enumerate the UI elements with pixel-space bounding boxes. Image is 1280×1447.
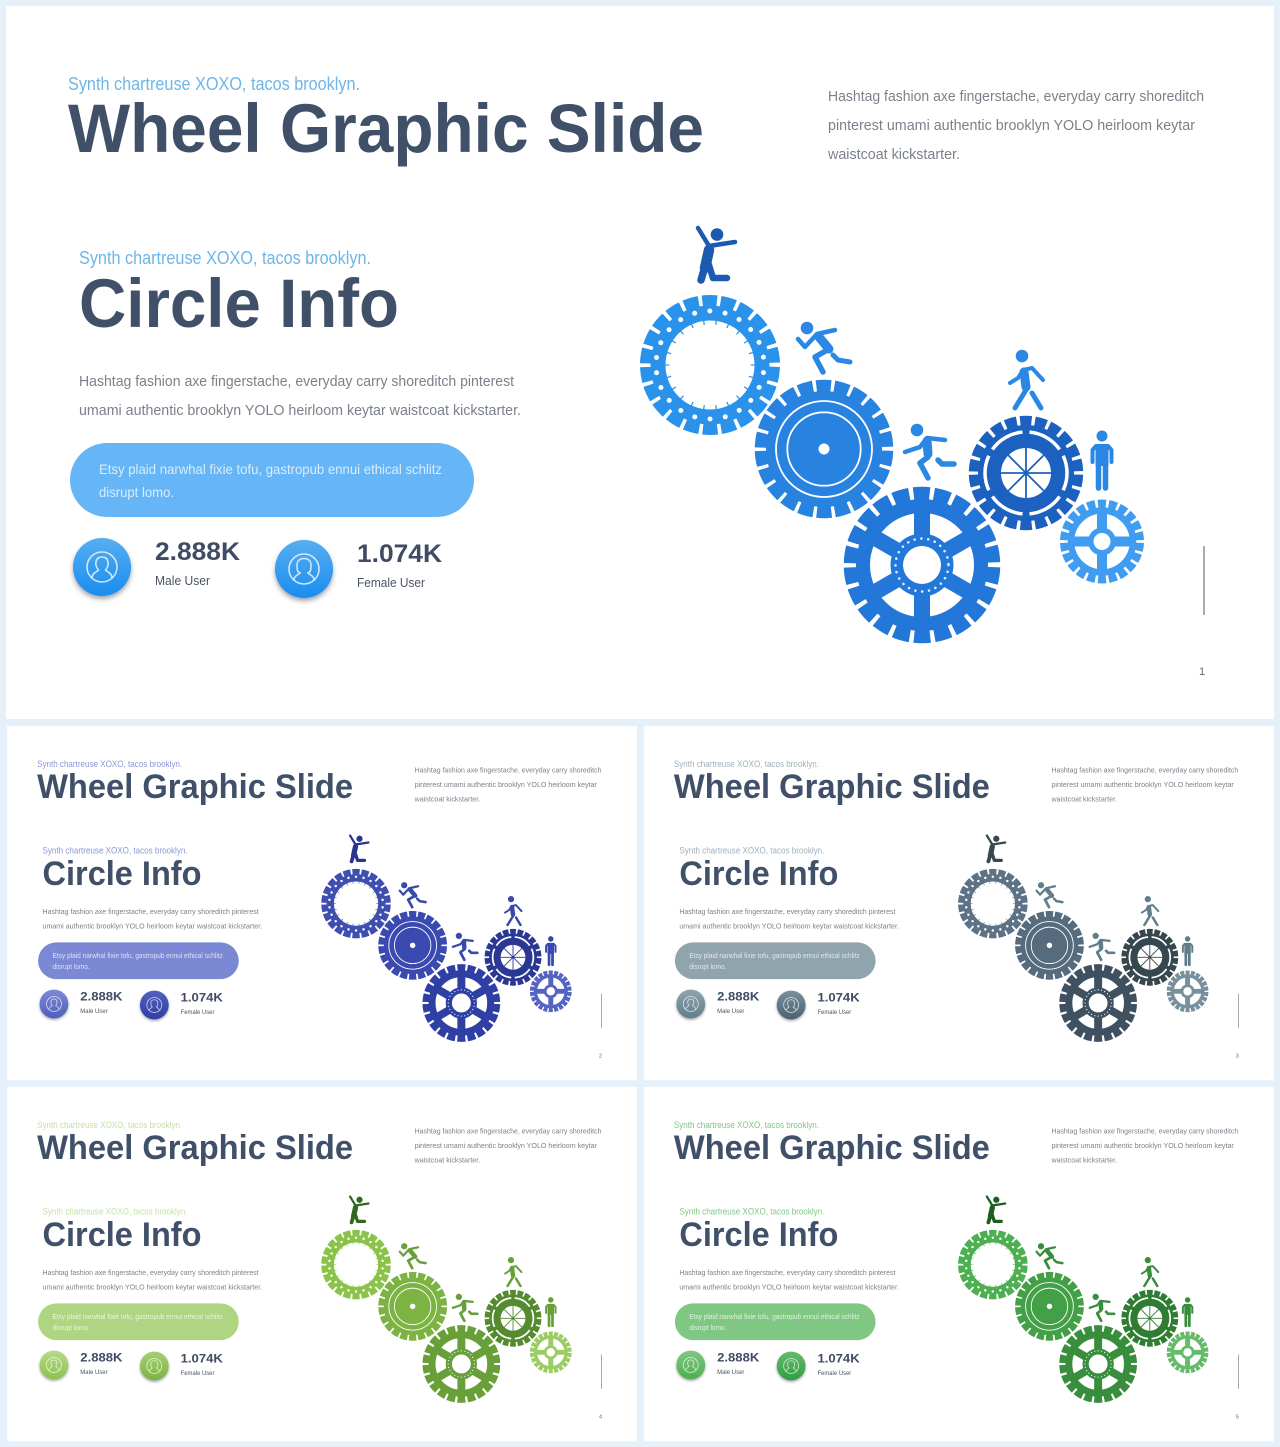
sub tagline: Synth chartreuse XOXO, tacos brooklyn. [43,845,188,855]
heading: Circle Info: Circle Info [679,855,838,893]
stat: female user: Female User [817,1370,852,1377]
callout pill [675,942,876,979]
page number: 2 [599,1054,602,1060]
panel: small slide gray [644,726,1274,1080]
page number: 1 [1199,666,1205,678]
figure: sprinter [905,424,954,478]
stat: female user: Female User [357,575,426,590]
intro text block [1050,765,1238,803]
stat: female user [275,540,442,598]
body text block [79,374,521,419]
stat: male user [40,990,123,1018]
callout pill: disrupt lomo. [689,964,727,971]
callout pill: Etsy plaid narwhal fixie tofu, gastropub ennui ethical schlitz [689,1314,860,1321]
page number: 4 [599,1415,602,1421]
intro text block: waistcoat kickstarter. [827,147,960,163]
callout pill: Etsy plaid narwhal fixie tofu, gastropub ennui ethical schlitz [52,1314,223,1321]
intro text block [1050,1126,1238,1164]
callout pill: disrupt lomo. [99,484,174,500]
callout pill [675,1303,876,1340]
panel: small slide lime [7,1087,637,1441]
stat: male user [676,1351,759,1379]
intro text block: Hashtag fashion axe fingerstache, everyday carry shoreditch [1051,1126,1238,1135]
intro text block [414,765,601,803]
stat: male user: 2.888K [155,538,240,566]
intro text block: Hashtag fashion axe fingerstache, everyday carry shoreditch [1051,765,1238,774]
tagline: Synth chartreuse XOXO, tacos brooklyn. [68,74,360,94]
stat: male user: 2.888K [717,1351,759,1365]
body text block: umami authentic brooklyn YOLO heirloom keytar waistcoat kickstarter. [679,1282,899,1291]
title: Wheel Graphic Slide [37,1129,353,1167]
body text block [43,907,262,930]
stat: male user: Male User [717,1369,745,1376]
tagline: Synth chartreuse XOXO, tacos brooklyn. [37,1120,182,1130]
stat: male user: 2.888K [80,990,123,1004]
gear 1 [646,300,774,430]
stat: female user: Female User [817,1009,852,1016]
heading: Circle Info: Circle Info [43,1216,202,1254]
figure: standing person [1092,430,1112,488]
stat: male user: Male User [155,573,211,588]
intro text block: pinterest umami authentic brooklyn YOLO heirloom keytar [415,1141,598,1150]
page number: 5 [1236,1415,1239,1421]
gears with figures [961,1197,1206,1400]
callout pill [38,942,239,979]
intro text block: pinterest umami authentic brooklyn YOLO heirloom keytar [828,118,1195,134]
stat: male user [676,990,759,1018]
title: Wheel Graphic Slide [68,90,704,167]
stat: female user: 1.074K [181,991,223,1005]
intro text block: Hashtag fashion axe fingerstache, everyday carry shoreditch [415,1126,601,1135]
intro text block: pinterest umami authentic brooklyn YOLO heirloom keytar [1051,1141,1234,1150]
body text block: Hashtag fashion axe fingerstache, everyday carry shoreditch pinterest [679,907,895,916]
body text block: Hashtag fashion axe fingerstache, everyday carry shoreditch pinterest [43,907,259,916]
tagline: Synth chartreuse XOXO, tacos brooklyn. [674,759,819,769]
figure: walker [1010,350,1043,408]
callout pill: Etsy plaid narwhal fixie tofu, gastropub ennui ethical schlitz [689,953,860,960]
sub tagline: Synth chartreuse XOXO, tacos brooklyn. [679,1206,824,1216]
figure: jumping person [698,228,735,280]
body text block: umami authentic brooklyn YOLO heirloom keytar waistcoat kickstarter. [43,1282,262,1291]
gear 3 [850,494,994,636]
body text block: Hashtag fashion axe fingerstache, everyday carry shoreditch pinterest [679,1268,895,1277]
heading: Circle Info: Circle Info [79,265,399,342]
stat: male user: Male User [80,1369,108,1376]
gear 4 [974,421,1078,525]
intro text block: waistcoat kickstarter. [1050,1155,1117,1164]
callout pill [38,1303,239,1340]
tagline: Synth chartreuse XOXO, tacos brooklyn. [37,759,182,769]
intro text block: Hashtag fashion axe fingerstache, everyday carry shoreditch [415,765,601,774]
sub tagline: Synth chartreuse XOXO, tacos brooklyn. [43,1206,188,1216]
stat: female user: 1.074K [817,991,860,1005]
stat: male user [40,1351,123,1379]
title: Wheel Graphic Slide [674,768,990,806]
stat: male user: 2.888K [80,1351,123,1365]
callout pill: Etsy plaid narwhal fixie tofu, gastropub ennui ethical schlitz [52,953,223,960]
gears with figures [324,836,569,1039]
body text block [679,1268,899,1291]
figure: runner [798,322,850,372]
heading: Circle Info: Circle Info [43,855,202,893]
body text block: umami authentic brooklyn YOLO heirloom keytar waistcoat kickstarter. [679,921,899,930]
stat: female user [140,991,223,1019]
heading: Circle Info: Circle Info [679,1216,838,1254]
intro text block: waistcoat kickstarter. [414,794,480,803]
panel: small slide indigo [7,726,637,1080]
stat: female user: 1.074K [817,1352,860,1366]
intro text block: pinterest umami authentic brooklyn YOLO heirloom keytar [415,780,598,789]
intro text block: waistcoat kickstarter. [1050,794,1117,803]
callout pill [70,443,474,517]
gear 5 [1064,504,1140,579]
callout pill: disrupt lomo. [52,964,90,971]
body text block: Hashtag fashion axe fingerstache, everyday carry shoreditch pinterest [79,374,514,390]
sub tagline: Synth chartreuse XOXO, tacos brooklyn. [79,248,371,268]
body text block: umami authentic brooklyn YOLO heirloom keytar waistcoat kickstarter. [43,921,262,930]
title: Wheel Graphic Slide [37,768,353,806]
body text block: Hashtag fashion axe fingerstache, everyday carry shoreditch pinterest [43,1268,259,1277]
stat: female user [140,1352,223,1380]
intro text block [827,89,1204,163]
stat: male user: 2.888K [717,990,759,1004]
stat: female user: 1.074K [357,540,442,568]
stat: female user [777,991,860,1019]
callout pill: disrupt lomo. [52,1325,90,1332]
intro text block: waistcoat kickstarter. [414,1155,480,1164]
gears with figures [646,228,1140,636]
intro text block [414,1126,601,1164]
stat: female user: Female User [181,1370,215,1377]
gears with figures [324,1197,569,1400]
body text block: umami authentic brooklyn YOLO heirloom keytar waistcoat kickstarter. [79,403,521,419]
body text block [679,907,899,930]
stat: male user: Male User [80,1008,108,1015]
sub tagline: Synth chartreuse XOXO, tacos brooklyn. [679,845,824,855]
intro text block: pinterest umami authentic brooklyn YOLO heirloom keytar [1051,780,1234,789]
callout pill: Etsy plaid narwhal fixie tofu, gastropub ennui ethical schlitz [99,461,442,477]
stat: female user: 1.074K [181,1352,223,1366]
page number: 3 [1236,1054,1239,1060]
gears with figures [961,836,1206,1039]
intro text block: Hashtag fashion axe fingerstache, everyday carry shoreditch [828,89,1204,105]
stat: female user: Female User [181,1009,215,1016]
stat: male user [73,538,240,596]
title: Wheel Graphic Slide [674,1129,990,1167]
callout pill: disrupt lomo. [689,1325,727,1332]
panel: small slide green [644,1087,1274,1441]
body text block [43,1268,262,1291]
tagline: Synth chartreuse XOXO, tacos brooklyn. [674,1120,819,1130]
panel: main slide blue [6,6,1274,719]
gear 2 [761,386,887,512]
stat: female user [777,1352,860,1380]
stat: male user: Male User [717,1008,745,1015]
